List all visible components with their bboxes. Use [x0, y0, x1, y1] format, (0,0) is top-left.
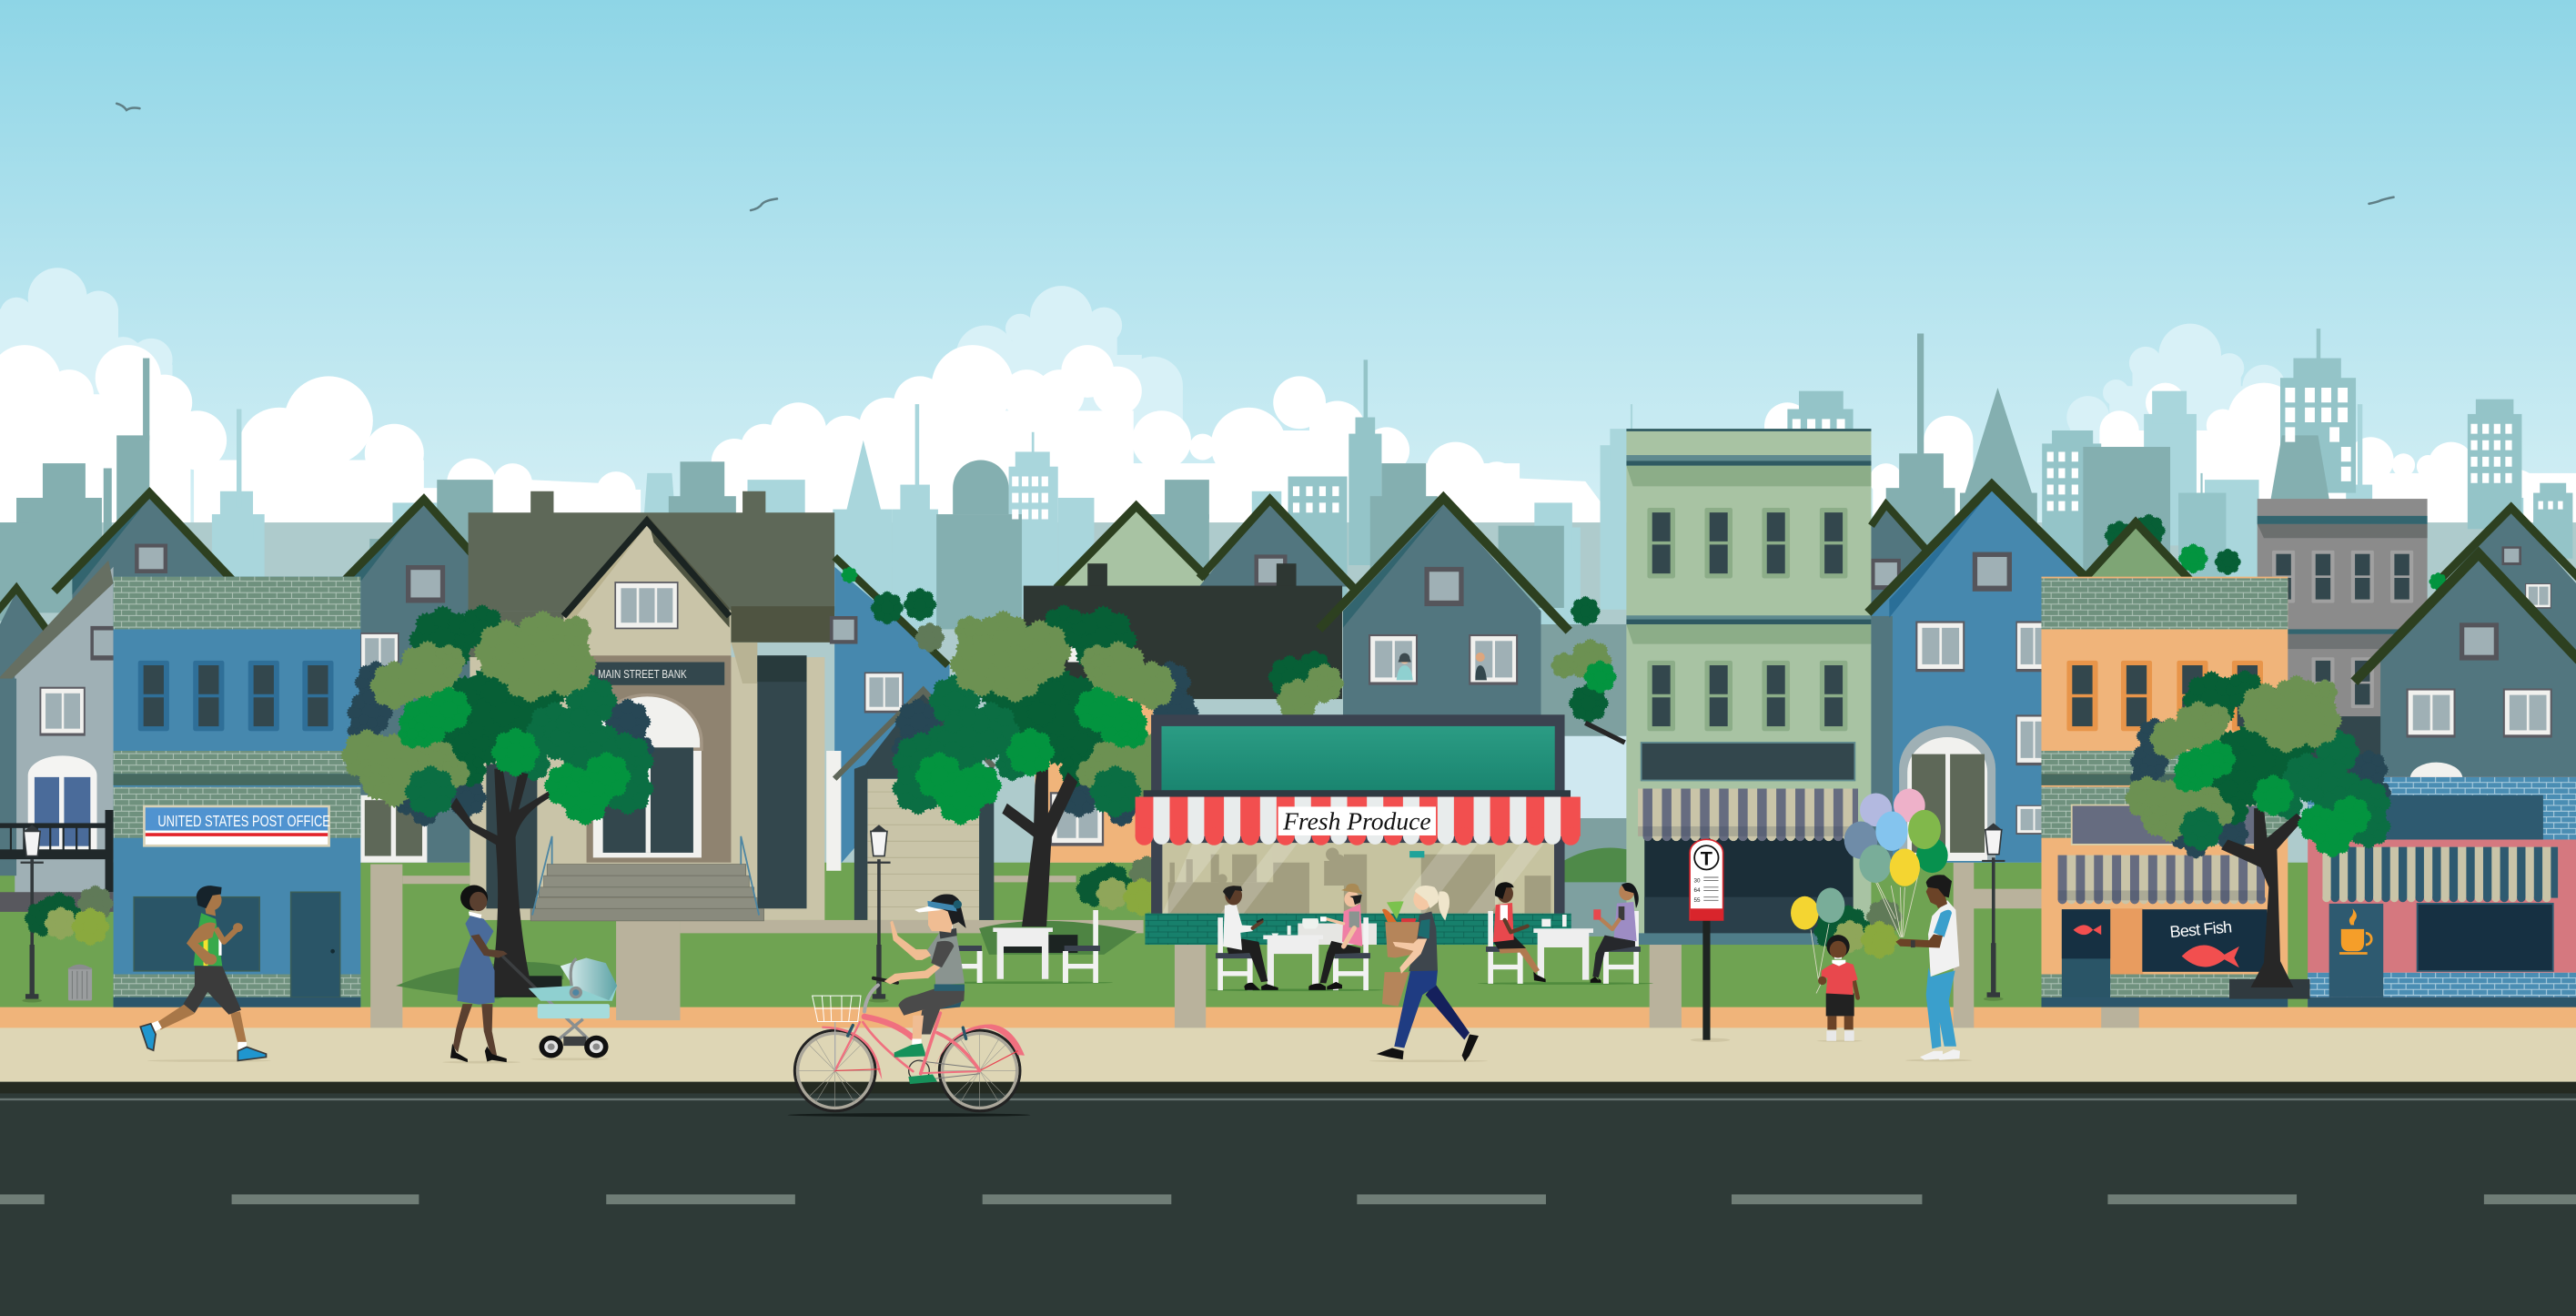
- person: woman in purple with cup: [1591, 883, 1639, 983]
- person: shopper with grocery bags: [1369, 886, 1488, 1062]
- post office sign: [143, 805, 330, 847]
- person: woman in red vest: [1493, 882, 1546, 982]
- orange verge strip: [0, 1007, 2576, 1028]
- road surface: [0, 1082, 2576, 1316]
- orange building: [2041, 577, 2288, 1007]
- bank steps: [530, 865, 764, 921]
- foliage beside far right house: [2429, 572, 2448, 591]
- bicycle basket: [813, 996, 861, 1070]
- awning: fish shop: [2058, 877, 2265, 900]
- bus stop sign: [1690, 839, 1730, 1042]
- stroller: [502, 956, 617, 1060]
- lamp post: left: [21, 825, 44, 1003]
- bus route numbers: 55: [1693, 897, 1701, 904]
- house: blue-grey centre with people in windows: [1319, 498, 1626, 936]
- person: runner: [140, 886, 271, 1062]
- market awning: red and white stripes: [1136, 797, 1581, 845]
- small dark cottage with siding: [834, 690, 994, 920]
- house: blue behind bank: [826, 557, 950, 871]
- ground lawn: [0, 863, 2576, 1010]
- icon: small red fish on door: [2074, 925, 2101, 935]
- coffee shop: [2308, 777, 2576, 1007]
- bus sign T logo: T: [1701, 846, 1712, 869]
- outdoor seating: middle set with two people: [1207, 884, 1383, 991]
- horizon haze band: [0, 522, 2576, 876]
- row houses behind market: [1024, 500, 1356, 863]
- fish shop sign: Best Fish: [2169, 917, 2233, 941]
- market sign: Fresh Produce: [1282, 808, 1431, 835]
- bank building: [469, 491, 834, 921]
- post office sign: UNITED STATES POST OFFICE: [157, 812, 330, 830]
- road lane dashes: [0, 1194, 2576, 1204]
- tree: left with trunk: [340, 604, 655, 999]
- bus route numbers: 64: [1693, 887, 1701, 894]
- market storefront: [1144, 714, 1571, 945]
- balloons: [1791, 789, 1948, 993]
- tree behind centre house: [1551, 596, 1625, 743]
- bus route numbers: [1693, 877, 1701, 904]
- green three-storey building: [1626, 429, 1871, 945]
- clouds: pale background: [0, 268, 2287, 493]
- outdoor seating: right set with two people: [1478, 882, 1653, 985]
- post office building: [114, 577, 360, 1007]
- person: balloon seller and child: [1791, 789, 1972, 1061]
- house: light grey with arched door: [0, 561, 116, 912]
- house: far-left blue-grey: [0, 588, 47, 871]
- city skyline: light buildings: [212, 391, 2523, 659]
- person in window: woman: [1397, 653, 1413, 680]
- house: far right front: [2354, 553, 2576, 782]
- market window silhouettes: [1168, 848, 1551, 914]
- person: woman pushing stroller: [442, 886, 617, 1063]
- bank sign: [595, 663, 724, 685]
- man holding balloons: [1895, 875, 1972, 1061]
- person: cyclist on pink bicycle: [788, 895, 1030, 1117]
- sidewalk: [0, 1027, 2576, 1082]
- tree: left-centre (mirrored): [891, 604, 1206, 955]
- bushes behind market: [1268, 650, 1345, 722]
- awning: coffee shop: [2322, 873, 2558, 898]
- grey building at right: [2258, 499, 2428, 795]
- skyline windows: [1012, 388, 2563, 519]
- child in red shirt: [1817, 935, 1863, 1042]
- bush group: centre: [1076, 855, 1166, 916]
- sky background: [0, 0, 2576, 542]
- city skyline: mid-tone buildings with windows: [1288, 329, 2572, 608]
- fish shop sign: [2169, 917, 2239, 967]
- house: upper-left blue-grey gable: [55, 493, 243, 690]
- lamp post: centre: [867, 825, 891, 1003]
- icon: birds in sky: [116, 104, 2394, 210]
- lamp post: right: [1982, 823, 2005, 1001]
- bank sign: MAIN STREET BANK: [598, 668, 687, 681]
- bicycle frame: [822, 978, 1025, 1081]
- balcony railing: [0, 810, 114, 892]
- awning: striped grey: [1638, 789, 1858, 836]
- icon: coffee cup: [2339, 908, 2371, 955]
- foliage behind green gable: [2104, 513, 2241, 575]
- clouds: white foreground: [0, 345, 2576, 526]
- house: green gable: [2085, 522, 2190, 583]
- bus route numbers: 30: [1693, 877, 1701, 884]
- bush group: right: [1813, 898, 1904, 959]
- tree: right with trunk: [2124, 670, 2392, 999]
- person in window: man on phone: [1475, 653, 1487, 680]
- bicycle wheels: [794, 1030, 1020, 1111]
- person: man in white jacket: [1223, 886, 1278, 990]
- trash can: [67, 965, 93, 1000]
- person: woman in pink with hat: [1308, 884, 1363, 990]
- outdoor tables and chairs: left set: [937, 910, 1113, 984]
- house: behind post office: [345, 500, 477, 863]
- paved garden paths: [370, 861, 2139, 1028]
- foliage behind blue house: [841, 566, 945, 653]
- bush group: left: [24, 885, 114, 947]
- house: blue right of green building: [1868, 485, 2088, 863]
- house: far right rear: [2441, 508, 2576, 723]
